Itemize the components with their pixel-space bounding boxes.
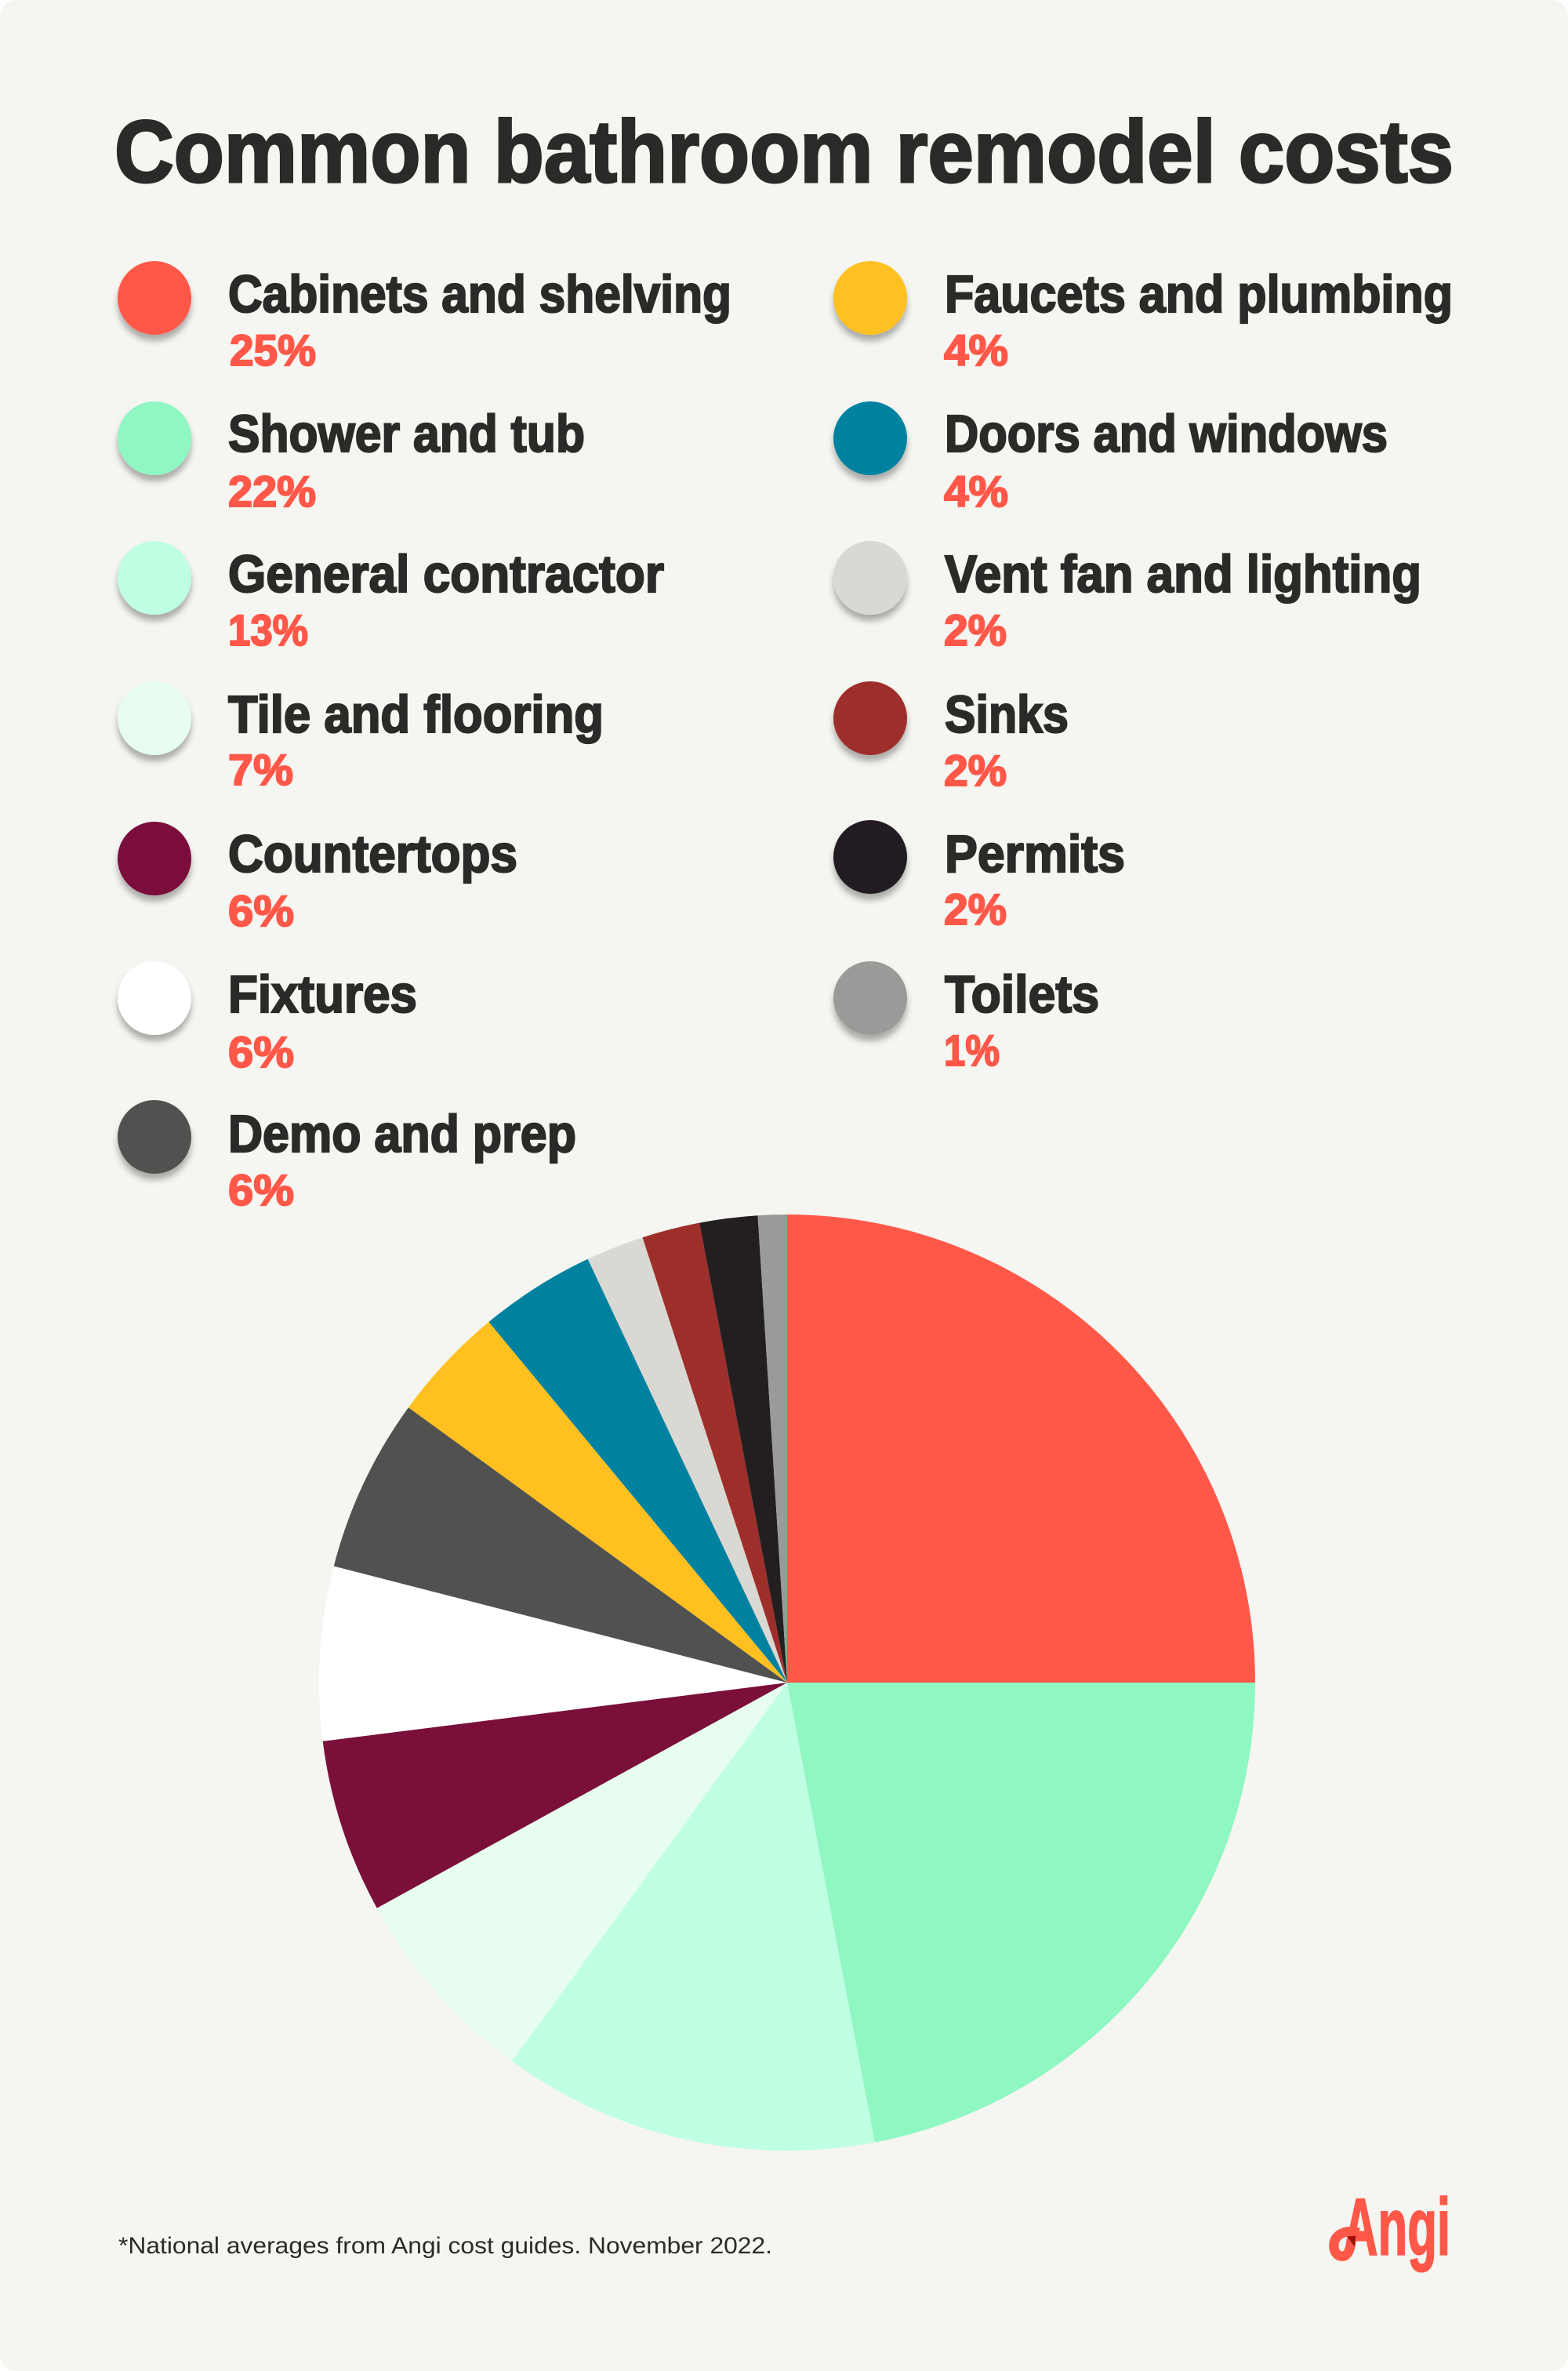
legend item: faucets and plumbing: Faucets and plumbing — [945, 265, 1453, 324]
legend item: countertops: 6% — [228, 886, 294, 935]
slice: vent fan and lighting 2% — [588, 1237, 787, 1683]
legend item: permits — [833, 820, 1125, 934]
legend item: vent fan and lighting: 2% — [944, 605, 1007, 655]
legend item: fixtures: Fixtures — [228, 965, 417, 1024]
legend item: shower and tub — [118, 401, 585, 516]
legend item: general contractor: 13% — [228, 605, 308, 655]
legend — [118, 261, 1453, 1215]
legend item: toilets: Toilets — [945, 965, 1099, 1024]
slice: doors and windows 4% — [489, 1259, 787, 1683]
legend item: doors and windows: Doors and windows — [945, 405, 1388, 463]
legend item: shower and tub: Shower and tub — [228, 405, 585, 463]
legend item: demo and prep — [118, 1100, 576, 1215]
legend item: permits: Permits — [945, 825, 1125, 884]
legend item: faucets and plumbing — [833, 261, 1453, 375]
slice: tile and flooring 7% — [377, 1683, 787, 2061]
slice: cabinets and shelving 25% — [787, 1215, 1255, 1683]
legend item: general contractor: General contractor — [228, 545, 664, 604]
legend item: permits: 2% — [944, 884, 1007, 934]
legend item: tile and flooring: 7% — [228, 745, 293, 794]
legend item: countertops — [118, 822, 517, 935]
slice: fixtures 6% — [319, 1567, 787, 1741]
legend item: vent fan and lighting: Vent fan and lighting — [945, 545, 1421, 604]
legend item: doors and windows: 4% — [944, 467, 1008, 516]
slice: countertops 6% — [323, 1683, 787, 1908]
slice: permits 2% — [699, 1215, 787, 1683]
slice: general contractor 13% — [512, 1683, 875, 2151]
legend item: toilets — [833, 961, 1099, 1075]
footnote: *National averages from Angi cost guides. November 2022. — [118, 2233, 772, 2259]
legend item: tile and flooring: Tile and flooring — [228, 685, 604, 744]
legend item: demo and prep: 6% — [228, 1165, 294, 1215]
logo: Angi — [1334, 2182, 1450, 2272]
legend item: cabinets and shelving: Cabinets and shelving — [228, 265, 731, 324]
legend item: shower and tub: 22% — [228, 467, 316, 516]
legend item: sinks: Sinks — [945, 685, 1069, 744]
pie chart — [319, 1215, 1255, 2151]
legend item: fixtures: 6% — [228, 1027, 294, 1077]
legend item: cabinets and shelving: 25% — [230, 325, 316, 375]
legend item: tile and flooring — [118, 681, 604, 794]
legend item: doors and windows — [833, 401, 1388, 516]
legend item: toilets: 1% — [944, 1026, 1000, 1075]
slice: sinks 2% — [643, 1223, 787, 1683]
logo: Angi: Angi — [1343, 2182, 1450, 2272]
legend item: cabinets and shelving — [118, 261, 731, 375]
slice: faucets and plumbing 4% — [408, 1322, 787, 1683]
legend item: countertops: Countertops — [228, 825, 517, 884]
legend item: general contractor — [118, 541, 664, 655]
legend item: demo and prep: Demo and prep — [228, 1105, 576, 1164]
slice: toilets 1% — [757, 1215, 787, 1683]
slice: shower and tub 22% — [787, 1683, 1255, 2142]
legend item: fixtures — [118, 961, 417, 1077]
legend item: faucets and plumbing: 4% — [944, 325, 1008, 375]
legend item: sinks — [833, 681, 1069, 795]
legend item: vent fan and lighting — [833, 541, 1421, 655]
legend item: sinks: 2% — [944, 746, 1007, 795]
slice: demo and prep 6% — [334, 1407, 787, 1683]
title: Common bathroom remodel costs — [114, 103, 1454, 201]
